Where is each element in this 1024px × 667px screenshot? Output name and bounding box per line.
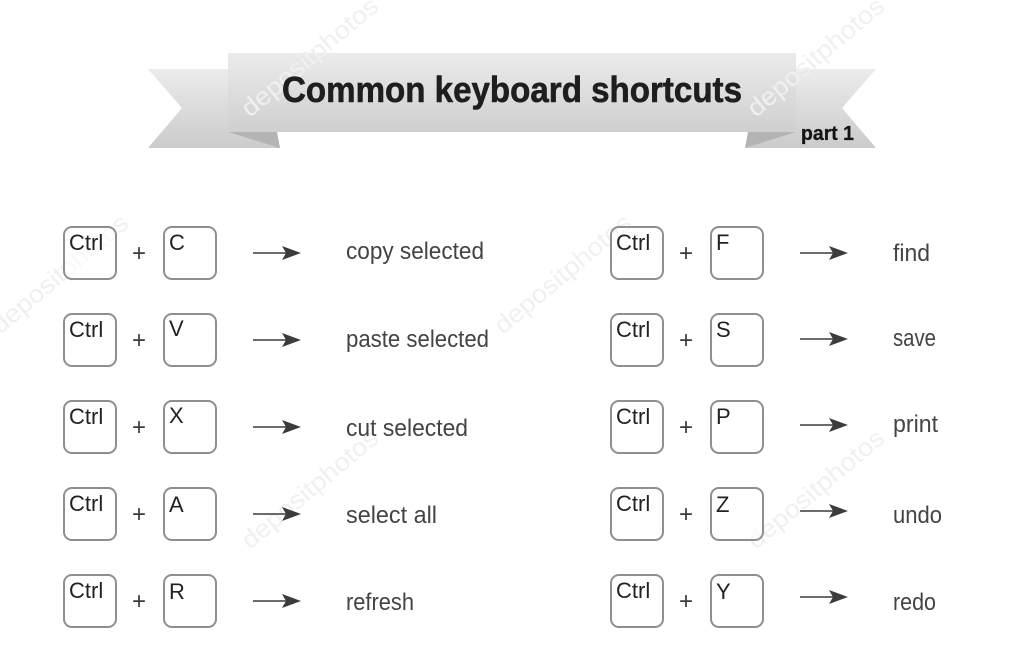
shortcut: Ctrl + C copy selected: copy selected: [346, 238, 484, 265]
shortcut: Ctrl + F find: find: [893, 240, 930, 267]
shortcut: Ctrl + C copy selected: +: [132, 240, 146, 267]
shortcut: Ctrl + P print: print: [893, 411, 938, 438]
shortcut: Ctrl + A select all: Ctrl: [69, 491, 103, 516]
shortcut: Ctrl + V paste selected: paste selected: [346, 326, 489, 353]
shortcut: Ctrl + S save: save: [893, 325, 936, 352]
shortcut: Ctrl + S save: [611, 314, 936, 366]
shortcut: Ctrl + F find: F: [716, 230, 729, 255]
shortcut: Ctrl + F find: +: [679, 240, 693, 267]
shortcut: Ctrl + C copy selected: C: [169, 230, 185, 255]
shortcut: Ctrl + R refresh: [64, 575, 414, 627]
shortcut: Ctrl + Z undo: +: [679, 501, 693, 528]
shortcut: Ctrl + P print: +: [679, 414, 693, 441]
shortcut: Ctrl + X cut selected: +: [132, 414, 146, 441]
stock watermarks: depositphotos: [489, 209, 637, 340]
shortcut: Ctrl + F find: [611, 227, 930, 279]
shortcut: Ctrl + R refresh: refresh: [346, 589, 414, 616]
title ribbon: [148, 53, 876, 148]
shortcut: Ctrl + P print: Ctrl: [616, 404, 650, 429]
shortcut: Ctrl + S save: S: [716, 317, 731, 342]
shortcut: Ctrl + Y redo: +: [679, 588, 693, 615]
ribbon right tail: [745, 69, 876, 148]
shortcut: Ctrl + Y redo: Y: [716, 579, 731, 604]
shortcut: Ctrl + X cut selected: X: [169, 403, 184, 428]
shortcut: Ctrl + F find: Ctrl: [616, 230, 650, 255]
shortcut: Ctrl + R refresh: Ctrl: [69, 578, 103, 603]
stock watermarks: depositphotos: [742, 0, 890, 123]
ribbon right fold: [745, 132, 796, 148]
shortcut: Ctrl + S save: +: [679, 327, 693, 354]
shortcut: Ctrl + A select all: select all: [346, 502, 437, 529]
shortcut: Ctrl + R refresh: +: [132, 588, 146, 615]
shortcut: Ctrl + S save: Ctrl: [616, 317, 650, 342]
shortcut: Ctrl + Y redo: [611, 575, 936, 627]
title: Common keyboard shortcuts: [282, 69, 742, 110]
shortcut: Ctrl + R refresh: R: [169, 579, 185, 604]
ribbon left tail: [148, 69, 280, 148]
shortcut: Ctrl + V paste selected: V: [169, 316, 184, 341]
shortcut: Ctrl + A select all: A: [169, 492, 184, 517]
stock watermarks: depositphotos: [236, 0, 384, 123]
shortcut: Ctrl + C copy selected: Ctrl: [69, 230, 103, 255]
shortcut: Ctrl + X cut selected: Ctrl: [69, 404, 103, 429]
shortcut: Ctrl + A select all: [64, 488, 437, 540]
ribbon main band: [228, 53, 796, 132]
shortcut: Ctrl + Y redo: redo: [893, 589, 936, 616]
stock watermarks: [0, 0, 890, 555]
subtitle: part 1: [801, 123, 854, 145]
shortcut: Ctrl + V paste selected: Ctrl: [69, 317, 103, 342]
shortcut: Ctrl + V paste selected: +: [132, 327, 146, 354]
ribbon left fold: [228, 132, 280, 148]
stock watermarks: depositphotos: [236, 424, 384, 555]
shortcut: Ctrl + C copy selected: [64, 227, 484, 279]
shortcut: Ctrl + Y redo: Ctrl: [616, 578, 650, 603]
stock watermarks: depositphotos: [742, 424, 890, 555]
shortcut: Ctrl + V paste selected: [64, 314, 489, 366]
shortcut: Ctrl + Z undo: [611, 488, 942, 540]
shortcut: Ctrl + P print: [611, 401, 938, 453]
shortcut: Ctrl + Z undo: Ctrl: [616, 491, 650, 516]
shortcut: Ctrl + A select all: +: [132, 501, 146, 528]
shortcut: Ctrl + P print: P: [716, 404, 731, 429]
shortcut: Ctrl + Z undo: undo: [893, 502, 942, 529]
shortcut: Ctrl + X cut selected: cut selected: [346, 415, 468, 442]
shortcut: Ctrl + Z undo: Z: [716, 492, 729, 517]
shortcut: Ctrl + X cut selected: [64, 401, 468, 453]
